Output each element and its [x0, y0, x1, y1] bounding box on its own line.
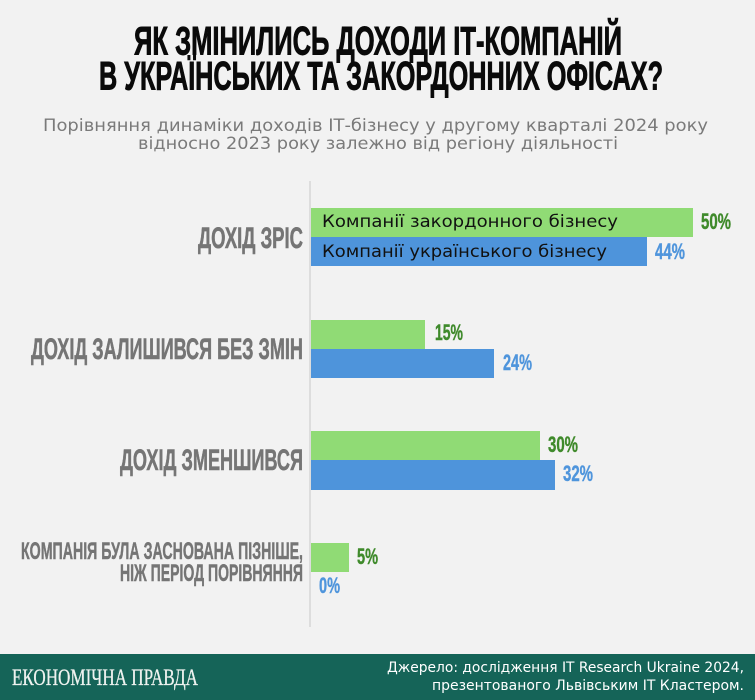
- group: income unchanged: [31, 320, 532, 378]
- bar: Ukrainian business 24%: [311, 349, 494, 378]
- group: company founded later: [21, 538, 378, 598]
- category label: income grew: ДОХІД ЗРІС: [198, 222, 303, 255]
- logo: Ekonomichna Pravda: ЕКОНОМІЧНА ПРАВДА: [12, 665, 198, 690]
- category label: company founded later: НІЖ ПЕРІОД ПОРІВНЯННЯ: [120, 560, 303, 587]
- subtitle: відносно 2023 року залежно від регіону діяльності: [138, 134, 618, 154]
- value: 32%: 32%: [563, 461, 593, 486]
- group: income decreased: [120, 431, 593, 490]
- legend label: Ukrainian business: Компанії українського бізнесу: [322, 242, 607, 262]
- category label: company founded later: [21, 538, 303, 587]
- bar: foreign business 30%: [311, 431, 540, 460]
- footer bar: [0, 654, 755, 700]
- bar: Ukrainian business 44%: [311, 237, 647, 266]
- source note: Джерело: дослідження IT Research Ukraine 2024,: [387, 660, 744, 676]
- category label: income decreased: ДОХІД ЗМЕНШИВСЯ: [120, 444, 303, 477]
- bar: foreign business 15%: [311, 320, 425, 349]
- value: 15%: 15%: [435, 320, 463, 345]
- value: 5%: 5%: [357, 544, 378, 569]
- legend label: foreign business: Компанії закордонного бізнесу: [322, 212, 618, 232]
- bar: foreign business 5%: [311, 543, 349, 572]
- value: 50%: 50%: [701, 209, 731, 234]
- bar: foreign business 50%: [311, 208, 693, 237]
- category label: company founded later: КОМПАНІЯ БУЛА ЗАСНОВАНА ПІЗНІШЕ,: [21, 538, 303, 565]
- value: 0%: 0%: [319, 573, 340, 598]
- subtitle: [43, 116, 708, 154]
- category label: income unchanged: ДОХІД ЗАЛИШИВСЯ БЕЗ ЗМІН: [31, 333, 303, 366]
- bar: Ukrainian business 32%: [311, 460, 555, 490]
- value: 24%: 24%: [503, 350, 532, 375]
- value: 44%: 44%: [655, 239, 685, 264]
- source note: презентованого Львівським ІТ Кластером.: [432, 678, 744, 694]
- group: income grew: [198, 208, 731, 266]
- source note: [387, 660, 744, 694]
- subtitle: Порівняння динаміки доходів ІТ-бізнесу у другому кварталі 2024 року: [43, 116, 708, 136]
- value: 30%: 30%: [548, 432, 578, 457]
- title: [99, 18, 663, 98]
